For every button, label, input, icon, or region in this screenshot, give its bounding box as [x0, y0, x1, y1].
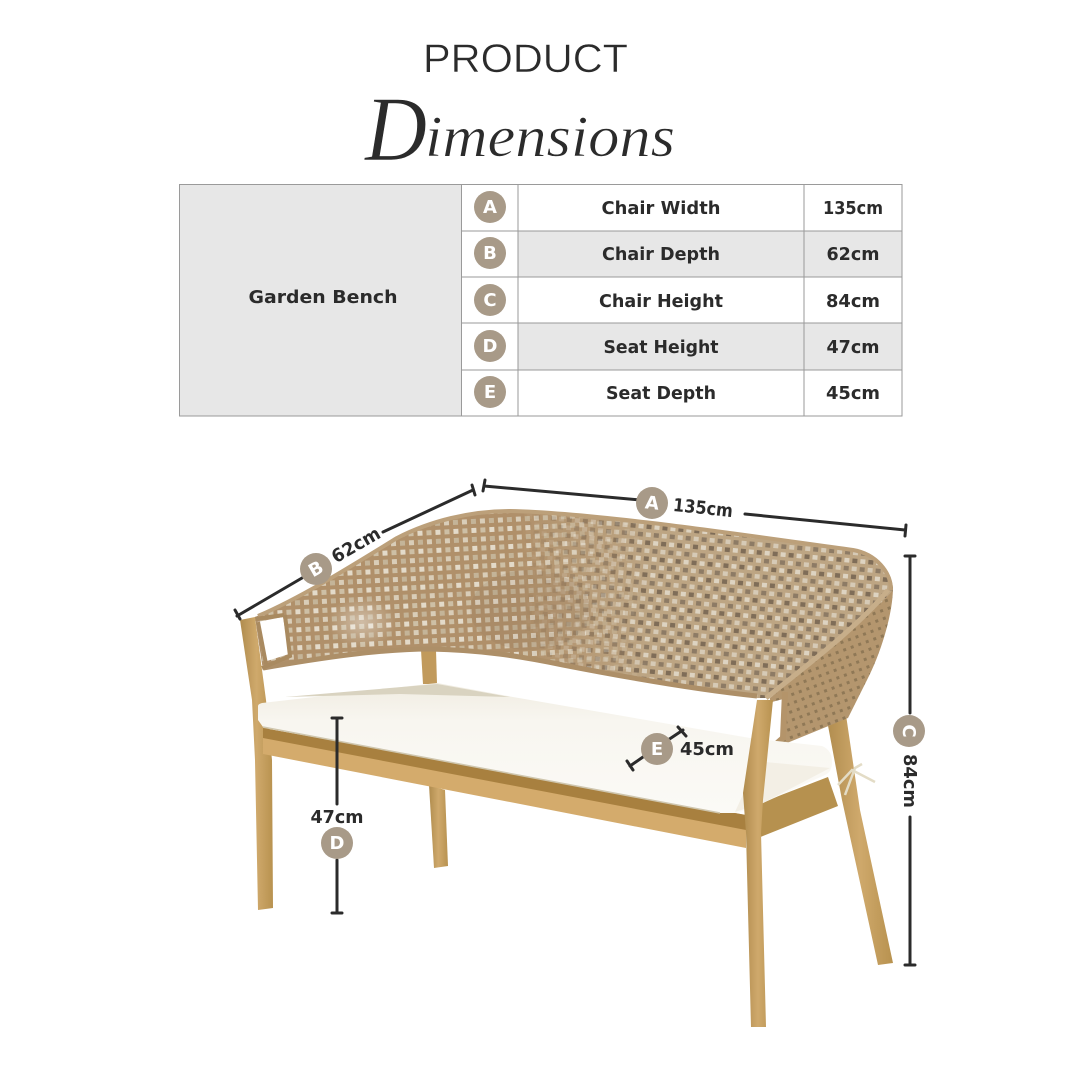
front rail [263, 728, 746, 848]
panel: product name cell: Garden Bench [248, 288, 398, 308]
dimension B: depth 62cm: 62cm [328, 523, 384, 568]
side panel rim [766, 590, 888, 698]
dimension D: seat height 47cm [310, 718, 364, 913]
woven side panel [768, 587, 893, 753]
row E: E [484, 382, 496, 403]
heading: dimensions script [363, 78, 675, 180]
dimension D: seat height 47cm: 47cm [310, 807, 364, 828]
row E: 45cm [826, 384, 880, 404]
bench illustration [240, 500, 900, 1027]
dimension B: depth 62cm: B [305, 557, 327, 582]
backrest lower rim [263, 649, 757, 696]
infographic canvas [179, 44, 925, 1027]
row D: 47cm [826, 338, 880, 358]
panel: product name cell [180, 184, 462, 416]
row A [474, 191, 883, 223]
cushion [258, 683, 832, 813]
dimension C: height 84cm [893, 556, 925, 965]
right hand opening [768, 698, 787, 748]
dimension annotations [235, 480, 925, 965]
woven backrest [255, 513, 893, 698]
row D: Seat Height [604, 338, 718, 358]
left hand opening [257, 617, 289, 661]
side rail [755, 777, 838, 838]
dimension B: depth 62cm [235, 485, 475, 619]
right front post [743, 700, 773, 1027]
dimension E: seat depth 45cm: 45cm [680, 739, 734, 760]
row A: 135cm [823, 199, 883, 219]
row B: Chair Depth [602, 245, 720, 265]
row A: Chair Width [602, 199, 720, 219]
right back leg [826, 715, 893, 965]
dimension D: seat height 47cm: D [330, 833, 344, 854]
back leg upper stub [421, 650, 437, 684]
heading: dimensions script: imensions [425, 104, 675, 169]
row E [474, 376, 880, 408]
dimension C: height 84cm: 84cm [899, 754, 920, 808]
row D [474, 330, 880, 362]
heading: dimensions script: D [363, 78, 427, 180]
row C: 84cm [826, 292, 880, 312]
row C: C [483, 290, 497, 311]
dimension A: width 135cm: 135cm [672, 495, 734, 522]
row C [474, 284, 880, 316]
row B: 62cm [826, 245, 880, 265]
cushion tie [838, 764, 875, 795]
dimension E: seat depth 45cm: E [651, 739, 663, 760]
dimension E: seat depth 45cm [627, 727, 734, 770]
title [363, 37, 675, 180]
back left leg [429, 785, 448, 868]
row B [474, 237, 880, 269]
dimension C: height 84cm: C [898, 724, 919, 738]
row E: Seat Depth [606, 384, 716, 404]
left front post [240, 617, 273, 910]
heading: product: PRODUCT [423, 37, 628, 81]
row A: A [483, 197, 497, 218]
row D: D [483, 336, 497, 357]
dimension A: width 135cm: A [644, 492, 660, 515]
row C: Chair Height [599, 292, 723, 312]
backrest rim [258, 511, 891, 616]
dimension A: width 135cm [483, 480, 906, 536]
dimensions table [180, 184, 902, 416]
table grid [462, 184, 902, 416]
row B: B [483, 243, 497, 264]
